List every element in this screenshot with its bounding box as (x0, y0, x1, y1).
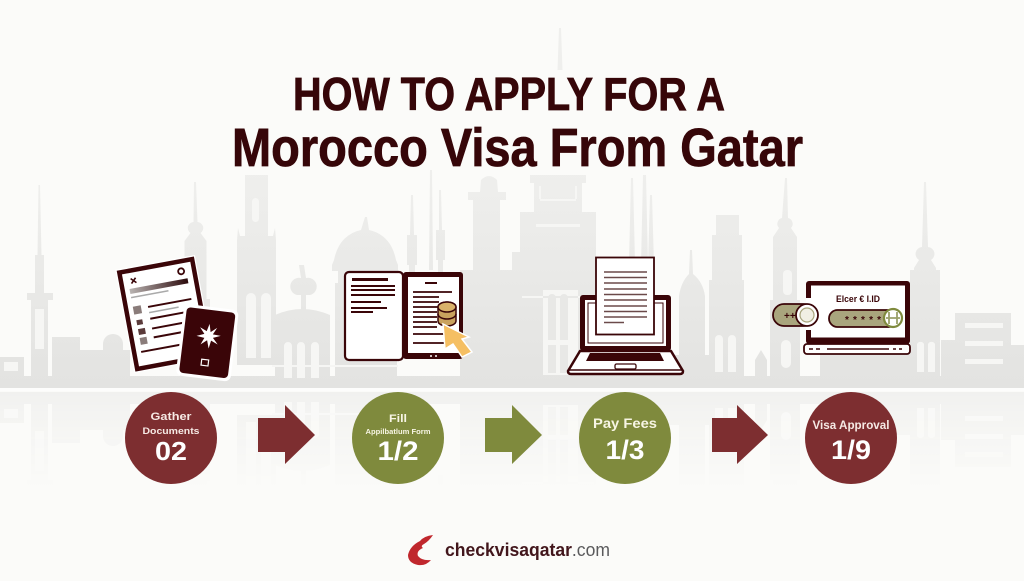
title (232, 68, 803, 178)
logo wordmark: checkvisaqatar.com (445, 539, 610, 560)
icon: laptop with document (568, 258, 683, 374)
arrow 2 (485, 405, 542, 464)
passport card (176, 304, 239, 382)
logo (408, 535, 610, 565)
horizon line (0, 388, 1024, 391)
screen label: Elcer € I.ID (836, 294, 880, 305)
step 3 circle (579, 392, 671, 484)
step 2 circle (352, 392, 444, 484)
logo mark (408, 535, 433, 565)
coin stack (438, 302, 456, 326)
laptop screen (580, 295, 671, 351)
paper sheet (596, 258, 654, 334)
step 4 circle (805, 392, 897, 484)
input pill left: ++ (784, 311, 796, 322)
title line 1: HOW TO APPLY FOR A (293, 68, 725, 120)
faint top spire (558, 28, 562, 70)
title line 2: Morocco Visa From Gatar (232, 118, 803, 178)
step 4 number: 1/9 (831, 435, 871, 465)
step 4 label: Visa Approval (812, 420, 890, 432)
cursor (443, 324, 472, 357)
tablet right page (403, 272, 463, 359)
step 1 circle (125, 392, 217, 484)
icon: documents and passport (117, 257, 239, 382)
monitor base (804, 344, 910, 354)
step 3 label: Pay Fees (593, 415, 657, 431)
skyline reflection (0, 392, 1024, 405)
tablet left page (345, 272, 403, 360)
document sheet (117, 257, 212, 371)
monitor screen (806, 281, 910, 344)
step 1 number: 02 (155, 436, 187, 466)
step 2 label: Fill (389, 413, 407, 425)
input pill right: ***** (845, 315, 881, 326)
laptop base (568, 351, 683, 374)
icon: online portal monitor (773, 281, 910, 354)
icon: application form tablet (345, 272, 472, 360)
step 2 sublabel: Appilbatlum Form (366, 429, 430, 436)
step 1 sublabel: Documents (142, 426, 200, 437)
step 3 number: 1/3 (606, 435, 644, 465)
arrow 1 (258, 405, 315, 464)
step 2 number: 1/2 (378, 436, 418, 466)
arrow 3 (712, 405, 768, 464)
background skyline (0, 170, 1024, 388)
step 1 label: Gather (150, 411, 192, 423)
